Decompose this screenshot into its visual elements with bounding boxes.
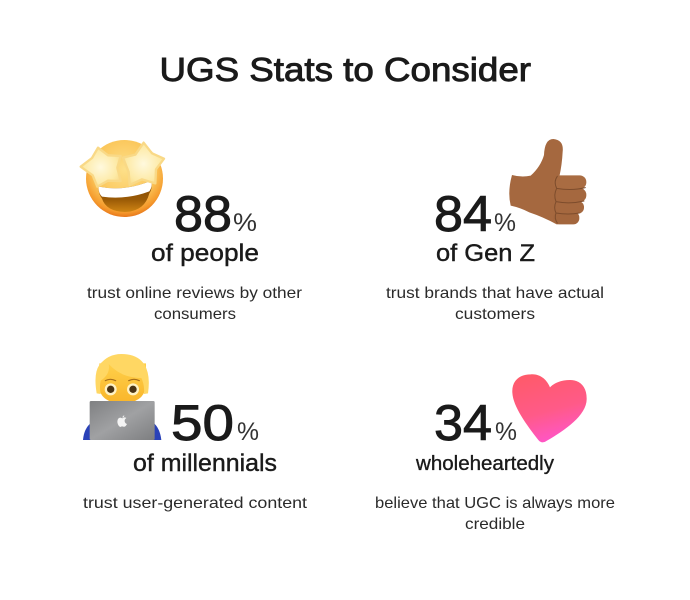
subheading: of people: of people bbox=[151, 240, 259, 267]
title: UGS Stats to Consider bbox=[160, 51, 531, 88]
panel: 34% wholeheartedly bbox=[375, 374, 615, 533]
body text: trust online reviews: consumers bbox=[154, 306, 236, 323]
body text: believe that UGC: credible bbox=[465, 516, 525, 533]
statistic: 50 percent bbox=[171, 395, 259, 451]
body text: trust online reviews bbox=[87, 285, 303, 323]
panel: 50% of millennials bbox=[83, 354, 308, 512]
statistic: 84 percent: 84 bbox=[434, 186, 492, 242]
statistic: 50 percent: 50 bbox=[171, 395, 234, 451]
statistic: 34 percent: 34 bbox=[434, 395, 492, 451]
body text: trust brands bbox=[386, 285, 604, 323]
statistic: 88 percent: 88 bbox=[174, 186, 232, 242]
subheading: of Gen Z: of Gen Z bbox=[436, 240, 535, 267]
body text: trust user-generated content: trust user-generated content bbox=[83, 495, 308, 512]
icon: thumbs up bbox=[509, 139, 586, 224]
subheading: of millennials: of millennials bbox=[133, 450, 277, 477]
panel: 88% of people bbox=[81, 140, 303, 323]
statistic: 84 percent: % bbox=[494, 209, 516, 237]
statistic: 88 percent bbox=[174, 186, 257, 242]
body text: believe that UGC: believe that UGC is always more bbox=[375, 495, 615, 512]
statistic: 88 percent: % bbox=[233, 209, 257, 237]
body text: believe that UGC bbox=[375, 495, 615, 533]
icon: person at laptop bbox=[83, 354, 161, 440]
icon: star-struck emoji bbox=[81, 140, 164, 217]
body text: trust brands: trust brands that have actual bbox=[386, 285, 604, 302]
statistic: 84 percent bbox=[434, 186, 516, 242]
body text: trust online reviews: trust online reviews by other bbox=[87, 285, 303, 302]
statistic: 34 percent bbox=[434, 395, 517, 451]
body text: trust brands: customers bbox=[455, 306, 535, 323]
subheading: wholeheartedly: wholeheartedly bbox=[415, 453, 554, 475]
panel: 84% of Gen Z bbox=[386, 139, 604, 323]
statistic: 34 percent: % bbox=[495, 418, 517, 446]
icon: heart bbox=[512, 374, 587, 442]
statistic: 50 percent: % bbox=[237, 418, 259, 446]
